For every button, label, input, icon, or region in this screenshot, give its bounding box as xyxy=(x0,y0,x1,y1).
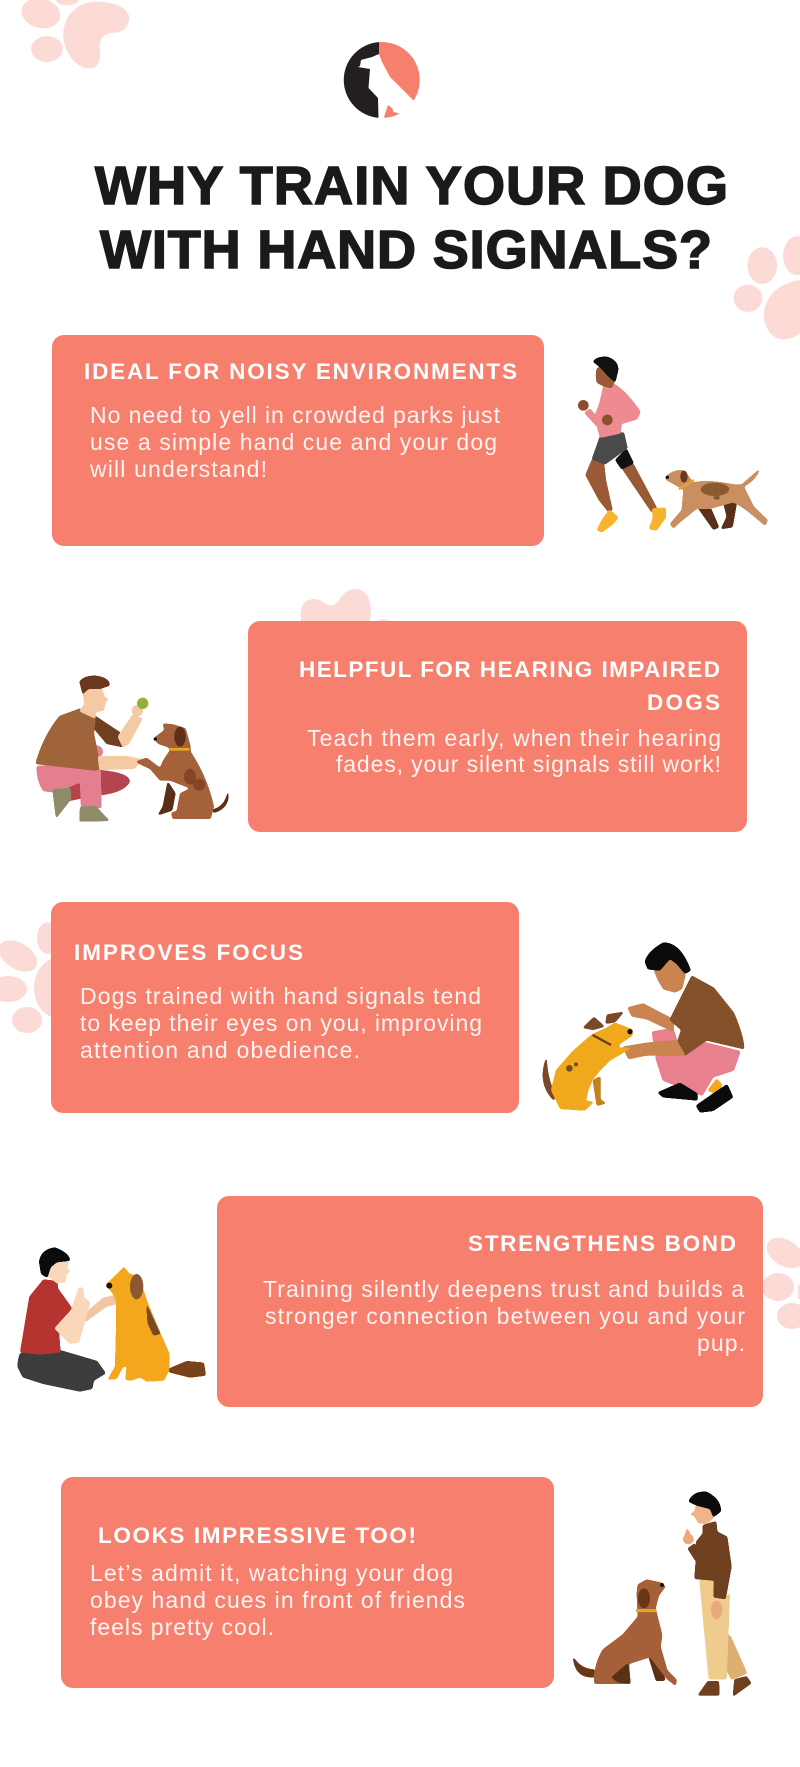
heading: IMPROVES FOCUS xyxy=(74,940,303,965)
paw print: left of third card xyxy=(0,922,86,1033)
heading: STRENGTHENS BOND xyxy=(468,1231,736,1256)
panel: helpful for hearing impaired dogs xyxy=(248,621,747,832)
heading: IDEAL FOR NOISY ENVIRONMENTS xyxy=(84,359,517,384)
paw print: top left xyxy=(15,0,129,68)
man xyxy=(622,942,744,1113)
illustration: standing person and brown dog xyxy=(573,1492,752,1697)
illustration: runner and dog xyxy=(578,357,768,533)
panel: improves focus xyxy=(51,902,519,1113)
person xyxy=(683,1492,752,1697)
illustration: crouching man and yellow dog xyxy=(543,942,744,1113)
runner xyxy=(578,357,666,533)
body text: Teach them early, when their hearing xyxy=(307,725,721,751)
dog xyxy=(573,1579,677,1686)
body text: to keep their eyes on you, improving xyxy=(80,1010,482,1036)
body text: Let’s admit it, watching your dog xyxy=(90,1560,453,1586)
body text: use a simple hand cue and your dog xyxy=(90,429,497,455)
title xyxy=(95,156,728,280)
body text xyxy=(90,1560,465,1640)
dog xyxy=(665,468,768,530)
dog xyxy=(105,1267,206,1382)
heading: LOOKS IMPRESSIVE TOO! xyxy=(98,1523,416,1548)
paw print: right of fourth card xyxy=(761,1231,800,1329)
logo: dog in circle xyxy=(344,42,421,119)
dog xyxy=(135,723,229,819)
heading: HELPFUL FOR HEARING IMPAIRED xyxy=(299,657,720,682)
body text: obey hand cues in front of friends xyxy=(90,1587,465,1613)
panel: ideal for noisy environments xyxy=(52,335,544,546)
body text: fades, your silent signals still work! xyxy=(336,751,721,777)
body text: No need to yell in crowded parks just xyxy=(90,402,501,428)
panel: looks impressive too xyxy=(61,1477,554,1688)
title: WITH HAND SIGNALS? xyxy=(100,220,712,280)
heading: DOGS xyxy=(647,690,720,715)
paw print: top right xyxy=(734,236,800,339)
body text: feels pretty cool. xyxy=(90,1614,274,1640)
body text xyxy=(263,1276,745,1356)
body text: Training silently deepens trust and builds a xyxy=(263,1276,744,1302)
illustration: man with ball and brown dog xyxy=(35,676,229,822)
body text: pup. xyxy=(697,1330,745,1356)
body text: will understand! xyxy=(89,456,267,482)
body text: stronger connection between you and your xyxy=(265,1303,745,1329)
heading xyxy=(299,657,720,715)
panel: strengthens bond xyxy=(217,1196,763,1407)
title: WHY TRAIN YOUR DOG xyxy=(95,156,728,216)
paw print: behind second card xyxy=(301,589,392,627)
man xyxy=(35,676,148,822)
body text xyxy=(307,725,721,777)
illustration: kneeling man and golden dog xyxy=(17,1247,206,1392)
dog xyxy=(543,1012,633,1111)
body text xyxy=(89,402,501,482)
body text xyxy=(80,983,482,1063)
body text: attention and obedience. xyxy=(80,1037,360,1063)
man xyxy=(17,1247,117,1392)
body text: Dogs trained with hand signals tend xyxy=(80,983,481,1009)
